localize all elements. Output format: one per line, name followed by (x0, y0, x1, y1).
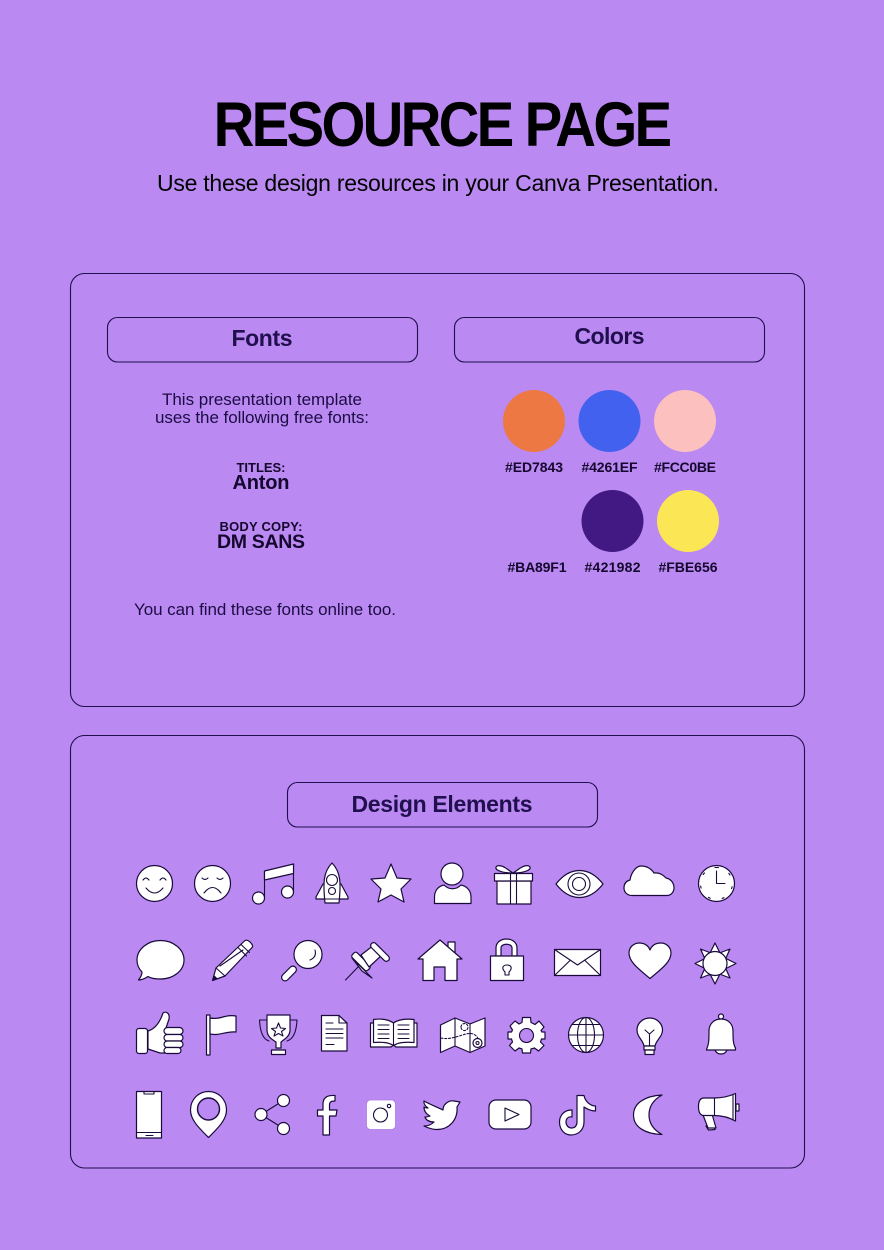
panel: fonts and colors (70, 274, 804, 706)
icon: pencil (212, 940, 253, 980)
panel: design elements (70, 736, 804, 1168)
icon: clock (698, 866, 734, 902)
color swatch: FBE656 (657, 490, 719, 575)
icon: gear (508, 1018, 545, 1053)
icon: folded map (440, 1018, 485, 1052)
icon: bell (706, 1014, 736, 1054)
color swatch: BA89F1: #BA89F1 (508, 559, 567, 575)
icon: facebook (318, 1095, 337, 1135)
icon: document (322, 1016, 347, 1051)
icon: crescent moon (634, 1095, 662, 1134)
icon: megaphone (698, 1094, 739, 1130)
icon: trophy (260, 1015, 297, 1054)
color swatch: ED7843: #ED7843 (505, 459, 563, 475)
icon: music notes (252, 864, 294, 904)
color swatch: 421982 (582, 490, 644, 575)
heading: colors: Colors (574, 323, 644, 349)
icon: eye (556, 870, 603, 898)
icon: magnifying glass (280, 940, 322, 982)
color swatch: 4261EF (578, 390, 640, 475)
font entry: titles: TITLES: (236, 460, 286, 475)
icon: padlock (490, 939, 524, 980)
heading: colors (454, 318, 764, 362)
color swatch: FCC0BE: #FCC0BE (654, 459, 716, 475)
heading: fonts (108, 318, 418, 362)
color swatch: FBE656: #FBE656 (658, 559, 718, 575)
color swatch: 4261EF: #4261EF (582, 459, 638, 475)
icon: flag (206, 1015, 236, 1055)
font entry: body copy (217, 519, 305, 553)
icon: twitter bird (424, 1101, 460, 1130)
font entry: body copy: BODY COPY: (220, 519, 302, 534)
icon: person (434, 863, 471, 904)
color swatch: FCC0BE (654, 390, 716, 475)
heading: fonts: Fonts (232, 325, 292, 351)
icon: smiley (136, 866, 172, 902)
color swatch: ED7843 (503, 390, 565, 475)
subtitle: Use these design resources in your Canva Presentation. (157, 170, 719, 196)
icon: sun (695, 943, 736, 984)
icon: open book (370, 1019, 417, 1047)
color swatch: 421982: #421982 (584, 559, 641, 575)
font entry: titles: Anton (232, 472, 290, 494)
icon: push pin (346, 941, 391, 980)
text block: font note: You can find these fonts online too. (134, 600, 396, 619)
text block: font intro: This presentation template (162, 390, 362, 409)
icon: location pin (190, 1092, 226, 1138)
icon: speech bubble (137, 940, 184, 980)
icon: light bulb (637, 1018, 662, 1054)
icon: instagram (366, 1100, 396, 1130)
icon: share (255, 1094, 290, 1134)
font entry: body copy: DM SANS (217, 531, 305, 553)
icon: star (371, 864, 411, 902)
title: RESOURCE PAGE (214, 89, 670, 160)
icon: youtube (489, 1100, 531, 1129)
heading: design elements: Design Elements (352, 791, 532, 817)
color swatch: BA89F1 (506, 490, 568, 575)
icon: heart (629, 943, 671, 978)
icon: rocket (316, 863, 348, 903)
heading: design elements (288, 782, 598, 827)
icon: thumbs up (136, 1012, 183, 1054)
font entry: titles (232, 460, 290, 494)
icon: house (418, 940, 462, 980)
icon: cloud (624, 866, 674, 896)
icon: gift box (494, 866, 532, 904)
icon: envelope (554, 950, 600, 976)
text block: font intro second line: uses the following free fonts: (155, 408, 369, 427)
icon: tiktok (560, 1096, 596, 1135)
icon: smartphone (136, 1092, 162, 1138)
icon: globe (568, 1018, 604, 1052)
icon: sad face (194, 866, 230, 902)
